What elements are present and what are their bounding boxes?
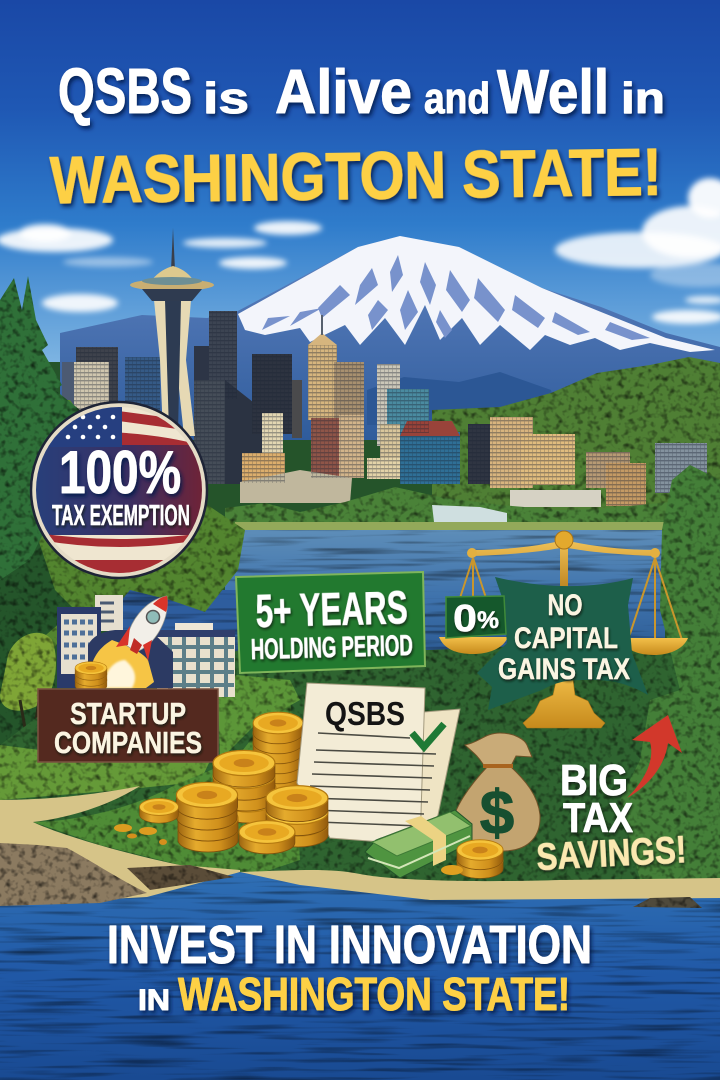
icon: money bag: $ xyxy=(480,779,514,848)
icon: space needle xyxy=(130,228,214,436)
banner: no capital gains tax: GAINS TAX xyxy=(498,653,630,686)
sign: 5+ years holding period: 5+ YEARS xyxy=(255,581,408,637)
title: is xyxy=(203,74,249,123)
icon: small coin stack xyxy=(75,662,107,692)
sign: startup companies xyxy=(38,689,218,762)
foothills xyxy=(367,372,560,425)
tag: 0 percent xyxy=(446,596,506,640)
coin stack: back xyxy=(253,712,303,804)
callout: big tax savings xyxy=(535,715,687,879)
forest hill right xyxy=(432,357,720,530)
closing tagline xyxy=(107,915,592,1020)
banner: no capital gains tax: NO xyxy=(548,589,582,622)
coin stack: left xyxy=(176,782,238,852)
sign: 5+ years holding period: HOLDING PERIOD xyxy=(250,630,413,666)
banner: no capital gains tax: CAPITAL xyxy=(514,622,618,655)
single coins xyxy=(114,799,295,854)
badge text: TAX EXEMPTION xyxy=(52,500,190,532)
panel: no capital gains tax scales xyxy=(439,531,688,728)
sign: startup companies: COMPANIES xyxy=(54,725,202,760)
left foliage xyxy=(0,400,245,700)
snow cap xyxy=(238,236,715,352)
closing tagline: IN xyxy=(138,984,170,1017)
pine tree left xyxy=(0,276,85,580)
title: Well xyxy=(497,58,609,127)
callout: big tax savings: BIG xyxy=(560,756,628,805)
icon: rocket xyxy=(116,596,168,661)
callout: big tax savings: SAVINGS! xyxy=(535,829,687,879)
panel: startup companies xyxy=(38,595,235,762)
meadow xyxy=(0,640,720,890)
background: sky xyxy=(0,0,720,362)
document: QSBS xyxy=(297,683,460,845)
badge: 100% tax exemption xyxy=(30,400,210,580)
callout: big tax savings: TAX xyxy=(563,794,633,841)
closing tagline: INVEST IN INNOVATION xyxy=(107,915,592,975)
coin stack: right xyxy=(266,786,328,847)
far shore trees xyxy=(225,487,670,527)
city skyline xyxy=(62,311,707,507)
title: QSBS xyxy=(58,55,192,127)
small bright tree left xyxy=(0,633,56,711)
bright grass left xyxy=(0,745,215,800)
title: Alive xyxy=(275,58,412,127)
snow streaks xyxy=(262,255,650,340)
right foliage xyxy=(620,465,720,880)
title xyxy=(49,55,665,218)
icon: rocket flame xyxy=(90,640,154,688)
rocks xyxy=(0,843,702,908)
tag: 0 percent: 0 xyxy=(453,598,477,640)
icon: coins near cash xyxy=(441,840,503,878)
icon: balance scale xyxy=(439,531,688,728)
banner: no capital gains tax xyxy=(477,577,648,710)
shoreline sand xyxy=(0,786,720,900)
title: and xyxy=(424,74,490,123)
dark forest left xyxy=(0,520,75,745)
coin stack: middle xyxy=(213,750,276,823)
mountain xyxy=(60,236,720,440)
icon: buildings xyxy=(57,595,235,697)
closing tagline: WASHINGTON STATE! xyxy=(178,968,570,1020)
bright grass center xyxy=(33,690,300,880)
dark tree trunks left xyxy=(20,695,40,745)
clouds xyxy=(0,178,720,324)
lake xyxy=(225,530,665,665)
bright grass upper xyxy=(218,675,300,760)
title: in xyxy=(621,74,665,123)
badge text: 100% xyxy=(59,439,181,506)
icon: check mark xyxy=(412,724,444,747)
tag: 0 percent: % xyxy=(477,607,499,634)
sign: 5+ years holding period xyxy=(236,572,425,673)
icon: cash stack xyxy=(365,810,472,878)
water patch behind startups xyxy=(110,590,245,635)
document: QSBS: QSBS xyxy=(325,695,405,732)
building windows overlay xyxy=(74,311,707,506)
water xyxy=(0,872,720,1080)
glass pavilion xyxy=(432,505,507,522)
sign: startup companies: STARTUP xyxy=(70,696,186,731)
badge text xyxy=(52,439,190,532)
icon: red arrow xyxy=(627,715,682,798)
icon: money bag xyxy=(453,733,540,851)
